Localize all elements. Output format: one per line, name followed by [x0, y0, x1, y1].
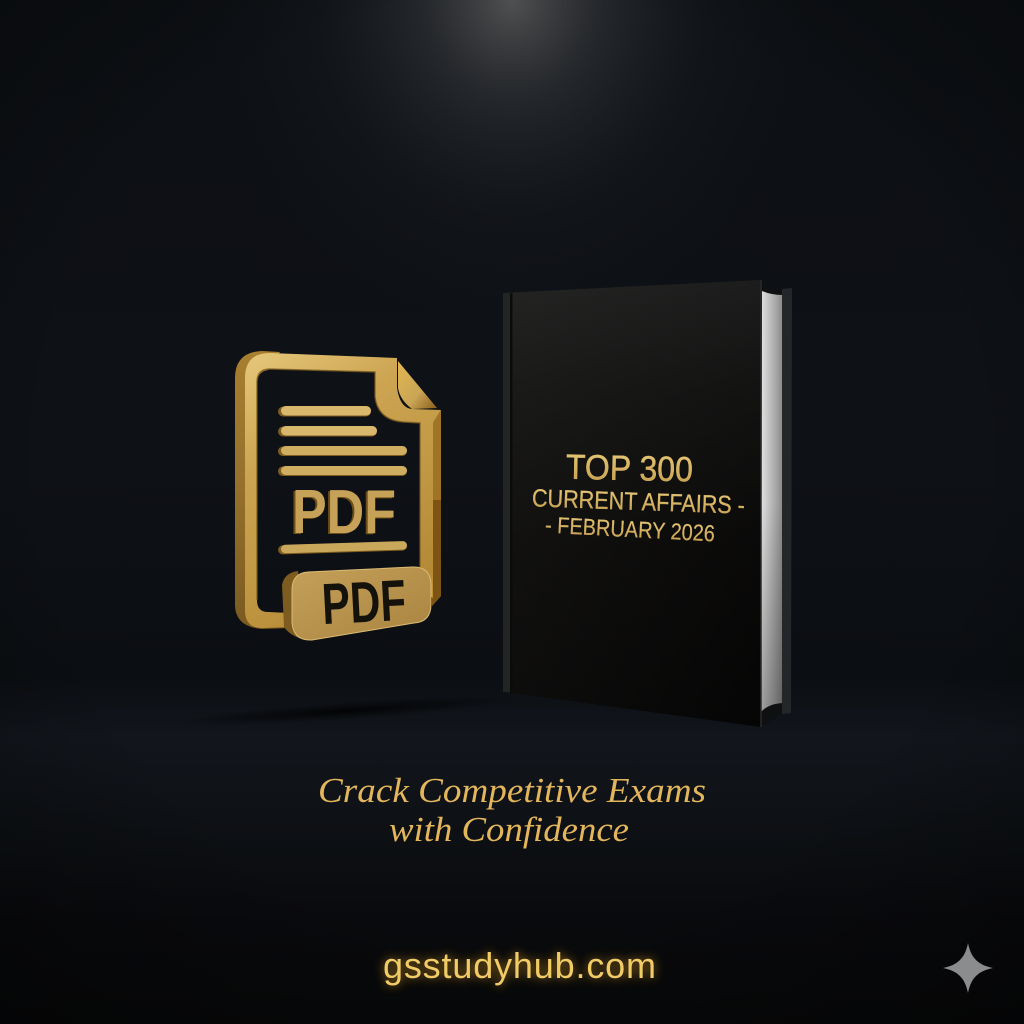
book title: february 2026: - FEBRUARY 2026: [544, 512, 716, 546]
page block: [761, 291, 782, 712]
floor shadow: [170, 690, 520, 732]
icon: sparkle: [943, 943, 993, 993]
content line 1: [278, 406, 371, 416]
PDF badge: [282, 567, 431, 640]
PDF label: PDF: [290, 479, 394, 548]
front cover: [503, 280, 761, 727]
book: [503, 280, 792, 727]
PDF label: PDF: [292, 478, 396, 547]
website url: gsstudyhub.com: [383, 945, 656, 986]
frame bevel shading: [257, 369, 420, 600]
book title: current affairs: CURRENT AFFAIRS -: [532, 484, 745, 520]
document fold triangle: [398, 361, 437, 409]
content line 5: [278, 541, 407, 555]
back cover: [782, 288, 792, 714]
tagline: Crack Competitive Exams: [318, 771, 706, 810]
website url: gsstudyhub.com: [383, 945, 656, 986]
book title: top 300: TOP 300: [566, 448, 693, 489]
PDF badge: PDF: [320, 568, 408, 637]
content line 3: [278, 446, 407, 456]
tagline: with Confidence: [389, 810, 629, 849]
content line 2: [278, 426, 377, 436]
tagline: [318, 771, 706, 849]
document front frame: [245, 353, 441, 628]
document extrusion: [235, 351, 441, 629]
icon: gold PDF document: [235, 351, 441, 640]
content line 4: [278, 466, 407, 476]
spine hinge: [503, 293, 512, 693]
